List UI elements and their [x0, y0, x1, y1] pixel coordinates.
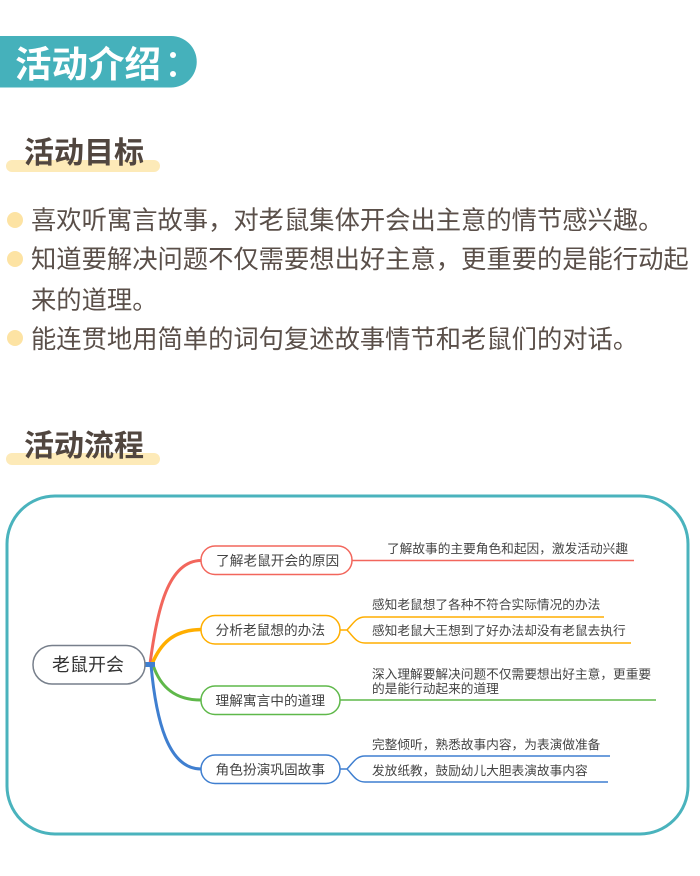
heading: activity goals: 活动目标 [24, 137, 144, 170]
title: activity introduction [0, 36, 197, 88]
root node [33, 646, 145, 684]
heading: activity process: 活动流程 [24, 430, 144, 463]
goal 1: 喜欢听寓言故事，对老鼠集体开会出主意的情节感兴趣。 [31, 207, 663, 235]
branch: understand cause: 了解老鼠开会的原因 [216, 554, 339, 568]
title: activity introduction: 活动介绍 [15, 44, 161, 85]
branch: understand cause: 了解故事的主要角色和起因，激发活动兴趣 [387, 541, 628, 556]
panel: mind map [7, 496, 688, 834]
goal 2 [7, 246, 689, 315]
branch: understand moral [201, 666, 656, 714]
branch: understand moral: 深入理解要解决问题不仅需要想出好主意，更重要 [372, 666, 651, 682]
branch: analyse ideas: 分析老鼠想的办法 [216, 623, 325, 638]
branch: role play [201, 737, 610, 784]
branch connector: blue [151, 665, 201, 769]
branch: analyse ideas: 感知老鼠大王想到了好办法却没有老鼠去执行 [372, 623, 626, 638]
goal 3: 能连贯地用简单的词句复述故事情节和老鼠们的对话。 [31, 326, 638, 354]
branch: understand cause [201, 541, 634, 574]
goals list [7, 207, 689, 354]
goal 2: 知道要解决问题不仅需要想出好主意，更重要的是能行动起 [31, 246, 689, 274]
branch: role play: 角色扮演巩固故事 [216, 762, 325, 778]
goal 2: 来的道理。 [31, 287, 158, 315]
root node: 老鼠开会 [52, 655, 124, 675]
branch: understand moral: 的是能行动起来的道理 [372, 681, 499, 696]
branch: role play: 发放纸教，鼓励幼儿大胆表演故事内容 [372, 763, 588, 778]
branch: role play: 完整倾听，熟悉故事内容，为表演做准备 [372, 737, 601, 752]
branch connector: red [150, 560, 201, 664]
branch: analyse ideas: 感知老鼠想了各种不符合实际情况的办法 [372, 597, 600, 612]
branch: understand moral: 理解寓言中的道理 [216, 692, 325, 708]
branch connector: green [153, 665, 201, 700]
branch connector: orange [152, 630, 201, 664]
branch: analyse ideas [201, 597, 631, 644]
